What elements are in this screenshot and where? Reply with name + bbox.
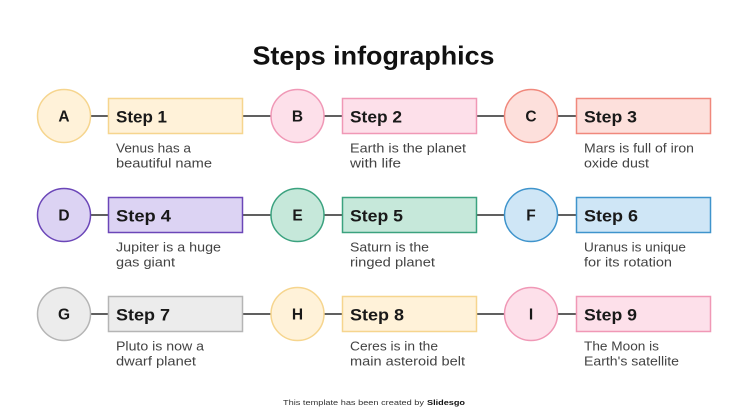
step D: Jupiter: D (58, 208, 70, 224)
title: Steps infographics (252, 40, 494, 70)
step D: Jupiter: Jupiter is a huge (116, 241, 221, 255)
step C: Mars (504, 90, 710, 171)
step H: Ceres: Ceres is in the (350, 340, 438, 354)
step G: Pluto: Pluto is now a (116, 340, 204, 354)
step D: Jupiter: Step 4 (116, 206, 172, 226)
footer credit: Slidesgo (427, 398, 465, 407)
step A: Venus: Venus has a (116, 142, 191, 156)
step E: Saturn: E (292, 208, 303, 224)
panel: row 1 (38, 90, 710, 171)
step I: Moon (504, 288, 710, 369)
step H: Ceres (271, 288, 476, 369)
step C: Mars: oxide dust (584, 157, 650, 171)
step A: Venus: Step 1 (116, 108, 167, 126)
footer credit: This template has been created by (283, 398, 424, 407)
step H: Ceres: H (292, 306, 303, 324)
panel: row 3 (38, 288, 710, 369)
step I: Moon: Step 9 (584, 306, 637, 324)
step C: Mars: Mars is full of iron (584, 142, 694, 156)
step A: Venus: beautiful name (116, 157, 212, 171)
step I: Moon: Earth's satellite (584, 355, 679, 369)
step B: Earth (271, 90, 476, 171)
step B: Earth: with life (349, 157, 401, 171)
step E: Saturn: Saturn is the (350, 241, 429, 255)
step B: Earth: Earth is the planet (350, 142, 467, 156)
step G: Pluto: Step 7 (116, 306, 170, 324)
step B: Earth: Step 2 (350, 108, 402, 126)
step E: Saturn (271, 188, 476, 270)
step H: Ceres: main asteroid belt (350, 355, 466, 369)
step I: Moon: The Moon is (584, 340, 659, 354)
step C: Mars: Step 3 (584, 108, 637, 126)
step D: Jupiter: gas giant (116, 256, 176, 270)
step A: Venus (38, 90, 242, 171)
step G: Pluto: dwarf planet (116, 355, 197, 369)
step F: Uranus: for its rotation (584, 256, 672, 270)
step F: Uranus: Uranus is unique (584, 241, 686, 255)
step E: Saturn: Step 5 (350, 206, 403, 226)
step A: Venus: A (58, 108, 70, 126)
step G: Pluto: G (58, 306, 70, 324)
footer credit (283, 398, 465, 407)
step F: Uranus: F (526, 208, 536, 224)
step E: Saturn: ringed planet (350, 256, 436, 270)
step G: Pluto (38, 288, 242, 369)
step F: Uranus: Step 6 (584, 206, 638, 226)
step C: Mars: C (525, 108, 537, 126)
step F: Uranus (504, 188, 710, 270)
panel: row 2 (38, 188, 710, 270)
step H: Ceres: Step 8 (350, 306, 404, 324)
step D: Jupiter (38, 188, 242, 270)
step I: Moon: I (529, 306, 533, 324)
step B: Earth: B (292, 108, 303, 126)
